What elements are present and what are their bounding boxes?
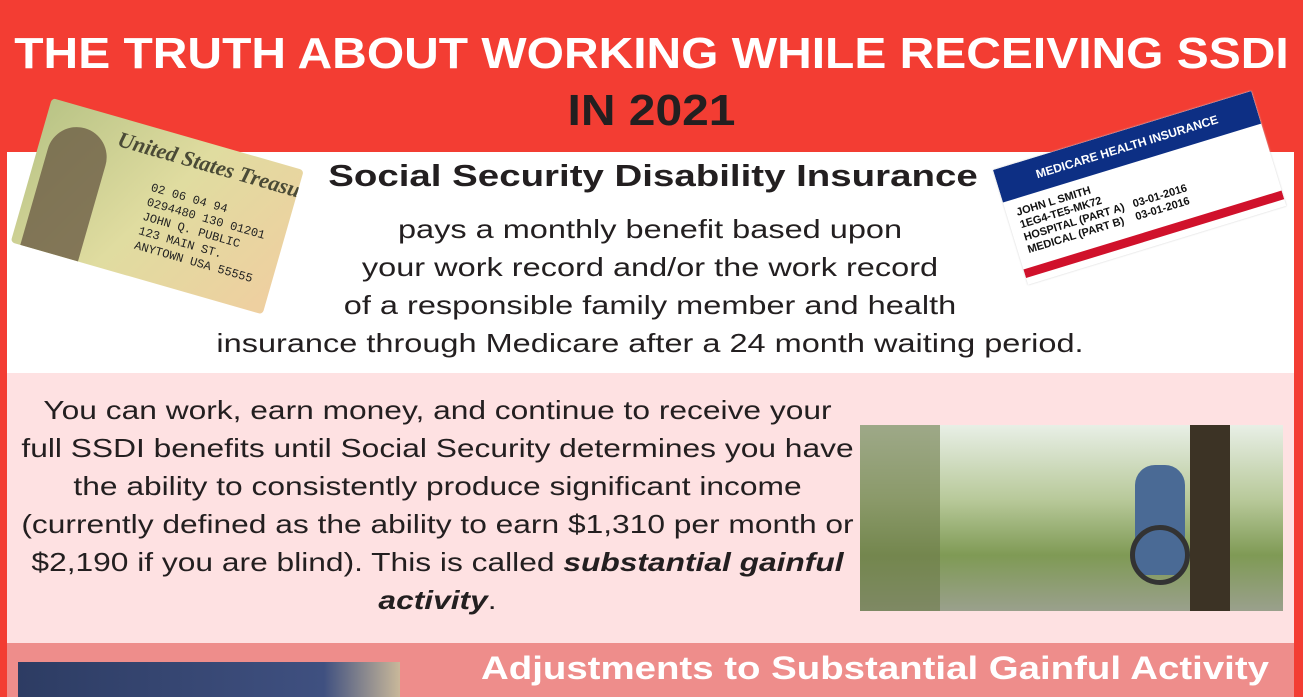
icon: medicare card: MEDICARE HEALTH INSURANCE (1034, 112, 1220, 181)
icon: treasury check: 0294480 130 01201 (145, 195, 267, 243)
icon: treasury check: 02 06 04 94 (149, 181, 229, 216)
text: SGA description: $2,190 if you are blind). This is called substantial gainful (31, 547, 844, 577)
icon: medicare card: HOSPITAL (PART A) 03-01-2016 (1022, 182, 1189, 244)
icon: medicare card: MEDICAL (PART B) 03-01-2016 (1026, 195, 1191, 256)
text: SSDI description (216, 214, 1084, 358)
text: SGA description: full SSDI benefits until Social Security determines you have (21, 433, 854, 463)
text: SSDI description: insurance through Medicare after a 24 month waiting period. (216, 328, 1084, 358)
panel: pink SGA (7, 373, 1294, 643)
title (14, 29, 1289, 135)
icon: treasury check (11, 98, 304, 314)
text: SGA description: activity. (378, 585, 497, 615)
icon: treasury check: 123 MAIN ST. (137, 224, 224, 262)
text: SGA description: (currently defined as the ability to earn $1,310 per month or (21, 509, 854, 539)
icon: medicare card (993, 91, 1286, 285)
title: IN 2021 (568, 86, 735, 135)
text: SSDI description: pays a monthly benefit based upon (398, 214, 902, 244)
icon: medicare card: 1EG4-TE5-MK72 (1019, 195, 1103, 231)
panel: white intro (7, 152, 1294, 373)
text: SSDI description: of a responsible family member and health (344, 290, 956, 320)
text: SGA description: You can work, earn money, and continue to receive your (43, 395, 832, 425)
image: wheelchair in park (860, 425, 1283, 611)
title: THE TRUTH ABOUT WORKING WHILE RECEIVING SSDI (14, 29, 1289, 78)
icon: medicare card: JOHN L SMITH (1015, 185, 1092, 219)
text: SSDI description: your work record and/or the work record (362, 252, 938, 282)
text: SGA description: the ability to consistently produce significant income (73, 471, 802, 501)
icon: treasury check: ANYTOWN USA 55555 (133, 239, 254, 286)
text: SGA description (21, 395, 854, 615)
panel: adjustments band (7, 643, 1294, 697)
icon: treasury check: JOHN Q. PUBLIC (141, 210, 242, 251)
heading: SSDI: Social Security Disability Insurance (328, 158, 978, 193)
heading: adjustments: Adjustments to Substantial Gainful Activity (481, 650, 1269, 686)
image: bottom photo (18, 662, 400, 697)
